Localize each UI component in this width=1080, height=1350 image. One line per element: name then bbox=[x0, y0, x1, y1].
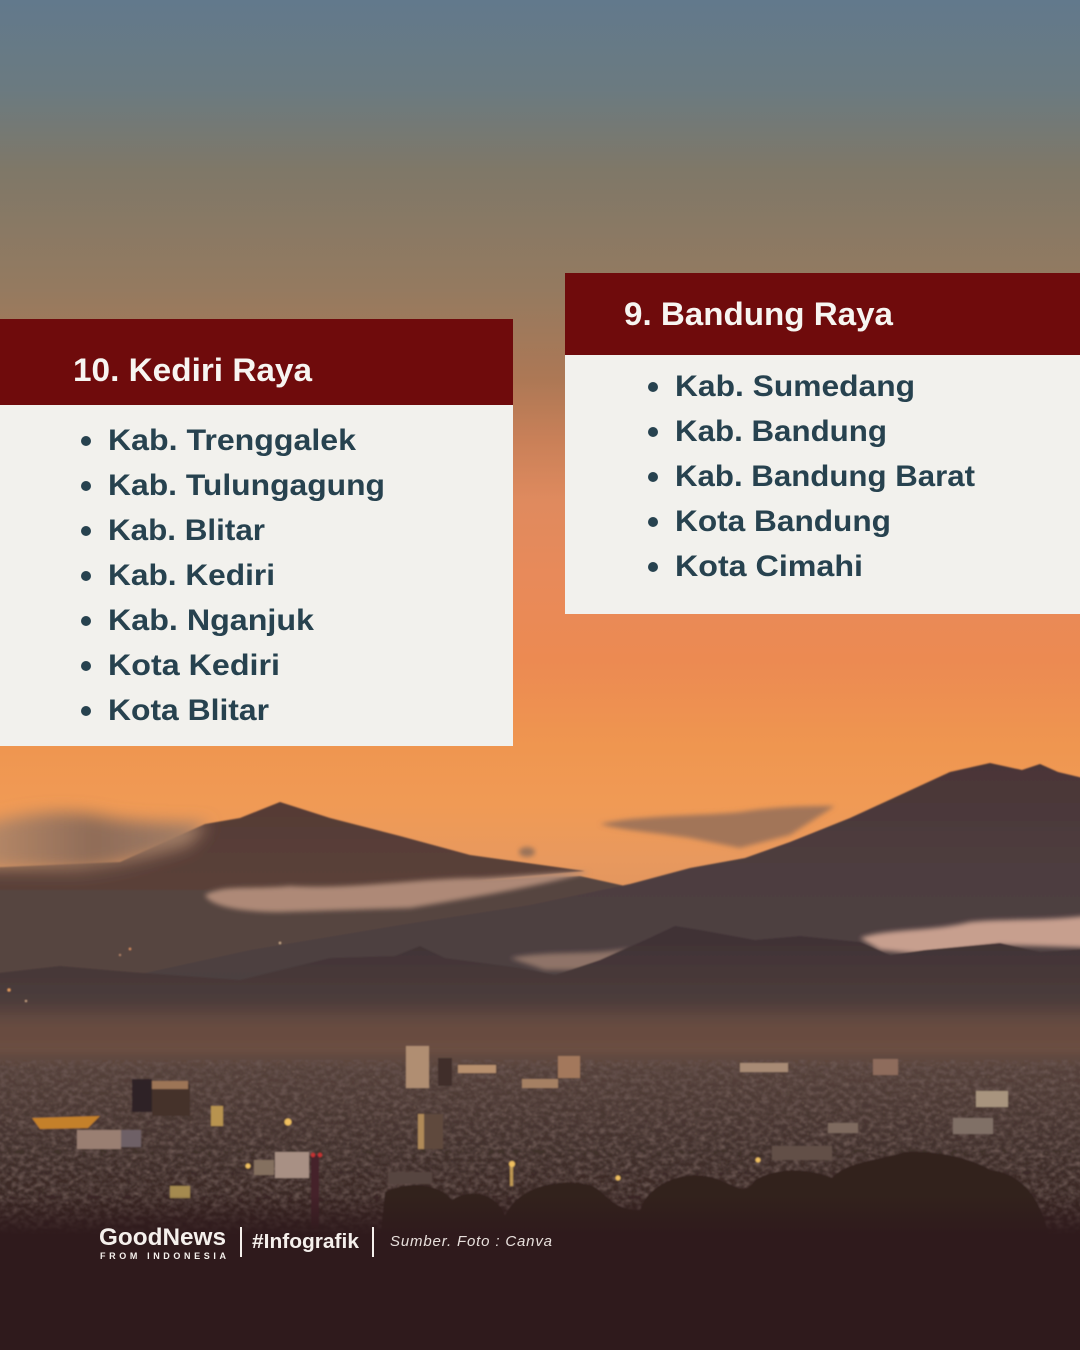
list: Kediri regions: Kab. Kediri bbox=[108, 559, 275, 592]
cloud: small valley mist bbox=[510, 948, 630, 970]
mountain: front ridge bbox=[0, 926, 1080, 1060]
city lights bbox=[8, 942, 760, 1186]
panel body: Kediri bbox=[0, 405, 513, 746]
footer: credits bbox=[99, 1224, 552, 1261]
list: Bandung regions: Kab. Sumedang bbox=[675, 370, 915, 403]
list: Bandung regions: Kab. Bandung bbox=[675, 415, 887, 448]
city ground bbox=[0, 1048, 1080, 1235]
panel header: Bandung bbox=[565, 273, 1080, 355]
city buildings bbox=[32, 1046, 1008, 1230]
source credit: Sumber. Foto : Canva bbox=[390, 1233, 552, 1250]
cloud: band under the volcano bbox=[205, 872, 590, 912]
heading: 10. Kediri Raya: 10. Kediri Raya bbox=[73, 352, 312, 388]
list: Bandung regions: Kota Bandung bbox=[675, 505, 891, 538]
mountain: right massif bbox=[90, 763, 1080, 985]
list: Bandung regions: Kab. Bandung Barat bbox=[675, 460, 975, 493]
background: sunset sky bbox=[0, 0, 1080, 1000]
panel: 10. Kediri Raya bbox=[0, 319, 513, 746]
logo: GoodNews from Indonesia: FROM INDONESIA bbox=[100, 1251, 226, 1261]
list: Kediri regions: Kab. Tulungagung bbox=[108, 469, 385, 502]
heading: 9. Bandung Raya: 9. Bandung Raya bbox=[624, 296, 893, 332]
list: Kediri regions: Kab. Nganjuk bbox=[108, 604, 314, 637]
list: Bandung regions bbox=[648, 370, 975, 583]
list: Kediri regions: Kab. Blitar bbox=[108, 514, 265, 547]
mountain: left volcano bbox=[0, 802, 585, 985]
panel body: Bandung bbox=[565, 355, 1080, 614]
hashtag: Infografik: #Infografik bbox=[252, 1231, 360, 1253]
city light specks bbox=[0, 1062, 1080, 1212]
list: Bandung regions: Kota Cimahi bbox=[675, 550, 863, 583]
list: Kediri regions bbox=[81, 424, 385, 727]
cloud: small puff bbox=[519, 847, 535, 857]
list: Kediri regions: Kota Blitar bbox=[108, 694, 269, 727]
footer band bbox=[0, 1235, 1080, 1350]
cloud: left of the volcano bbox=[0, 812, 208, 870]
mountain: lower slope under the cloud bbox=[0, 876, 625, 990]
treeline silhouettes bbox=[380, 1152, 1050, 1240]
cloud: band on the right bbox=[860, 914, 1080, 955]
footer fade bbox=[0, 1195, 1080, 1235]
panel header: Kediri bbox=[0, 319, 513, 405]
list: Kediri regions: Kota Kediri bbox=[108, 649, 280, 682]
city texture bbox=[0, 1060, 1080, 1235]
panel: 9. Bandung Raya bbox=[565, 273, 1080, 614]
haze over city edge bbox=[0, 1015, 1080, 1060]
list: Kediri regions: Kab. Trenggalek bbox=[108, 424, 356, 457]
logo: GoodNews from Indonesia: GoodNews bbox=[99, 1224, 226, 1251]
cloud: wisp at right mountain bbox=[600, 806, 835, 848]
background: mountain landscape bbox=[0, 763, 1080, 1240]
